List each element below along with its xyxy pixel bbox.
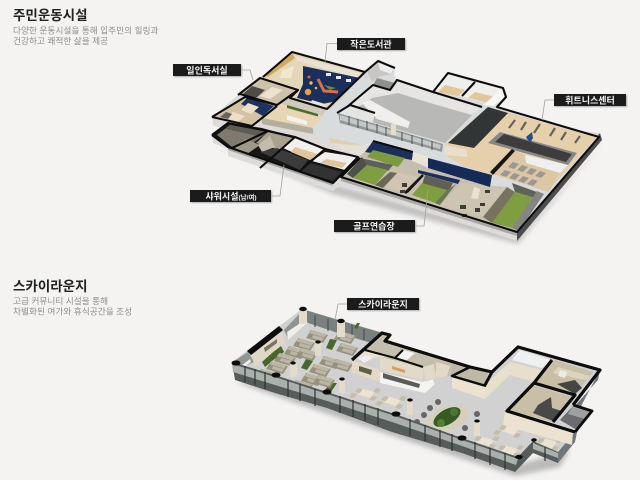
room: lobby lounge (262, 98, 327, 134)
description (13, 24, 159, 46)
callout: 휘트니스센터: 휘트니스센터 (565, 94, 615, 105)
title: 주민운동시설 (13, 8, 88, 23)
callout: 골프연습장 (334, 190, 428, 233)
section heading: 주민운동시설 (13, 8, 159, 46)
wall art (264, 339, 277, 352)
feature wall (250, 332, 285, 366)
callout: 일인독서실: 일인독서실 (186, 64, 228, 75)
cafe tables (349, 388, 563, 458)
shower rooms (217, 125, 358, 181)
black walls (352, 333, 600, 432)
core rooms (352, 334, 593, 445)
callout: 휘트니스센터 (542, 94, 627, 120)
pillars (290, 309, 480, 436)
tower stair (367, 62, 395, 90)
title: 스카이라운지 (13, 279, 88, 294)
right outer walls (557, 370, 600, 463)
description: 다양한 운동시설을 통해 입주민의 힐링과 (13, 24, 159, 36)
service rooms (435, 74, 506, 106)
lower wing floor slab (212, 123, 358, 183)
lounge seating groups (256, 330, 358, 393)
description: 차별화된 여가와 휴식공간을 조성 (13, 306, 132, 316)
description (13, 296, 132, 316)
planters (262, 323, 360, 392)
room: small library (262, 53, 368, 114)
navy wall (428, 158, 492, 187)
room: fitness centre (445, 107, 597, 192)
black wall lines (212, 52, 599, 232)
description: 건강하고 쾌적한 삶을 제공 (13, 35, 108, 46)
description: 고급 커뮤니티 시설을 통해 (13, 296, 108, 306)
golf practice rooms and lounge (341, 141, 544, 232)
callout: 스카이라운지 (335, 298, 420, 320)
outer wall base (212, 110, 602, 241)
back glazing (236, 309, 383, 368)
floor plan: sky lounge (232, 307, 600, 476)
callout: 샤워시설: 샤워시설(남/여) (205, 190, 257, 201)
callout: 일인독서실 (173, 64, 253, 80)
black left wall (247, 326, 283, 355)
upper wing floor slab (212, 52, 599, 232)
callout: 스카이라운지: 스카이라운지 (358, 298, 408, 309)
callout: 작은도서관 (325, 38, 406, 62)
callout: 골프연습장: 골프연습장 (353, 220, 395, 231)
front glazing (232, 362, 558, 472)
drop shadow (214, 142, 604, 244)
room: single reading room upper (240, 79, 296, 104)
callout: 샤워시설 (190, 165, 284, 203)
room: single reading room lower (214, 98, 274, 125)
floor plan: community sports facilities (212, 52, 604, 244)
central island planter (414, 398, 480, 440)
tiled corridor (312, 75, 442, 158)
hall (338, 80, 482, 152)
black pillar caps (232, 307, 537, 459)
lounge floor (232, 309, 600, 457)
drop shadow (235, 382, 570, 476)
callout: 작은도서관: 작은도서관 (350, 38, 392, 49)
section heading: 스카이라운지 (13, 279, 132, 316)
